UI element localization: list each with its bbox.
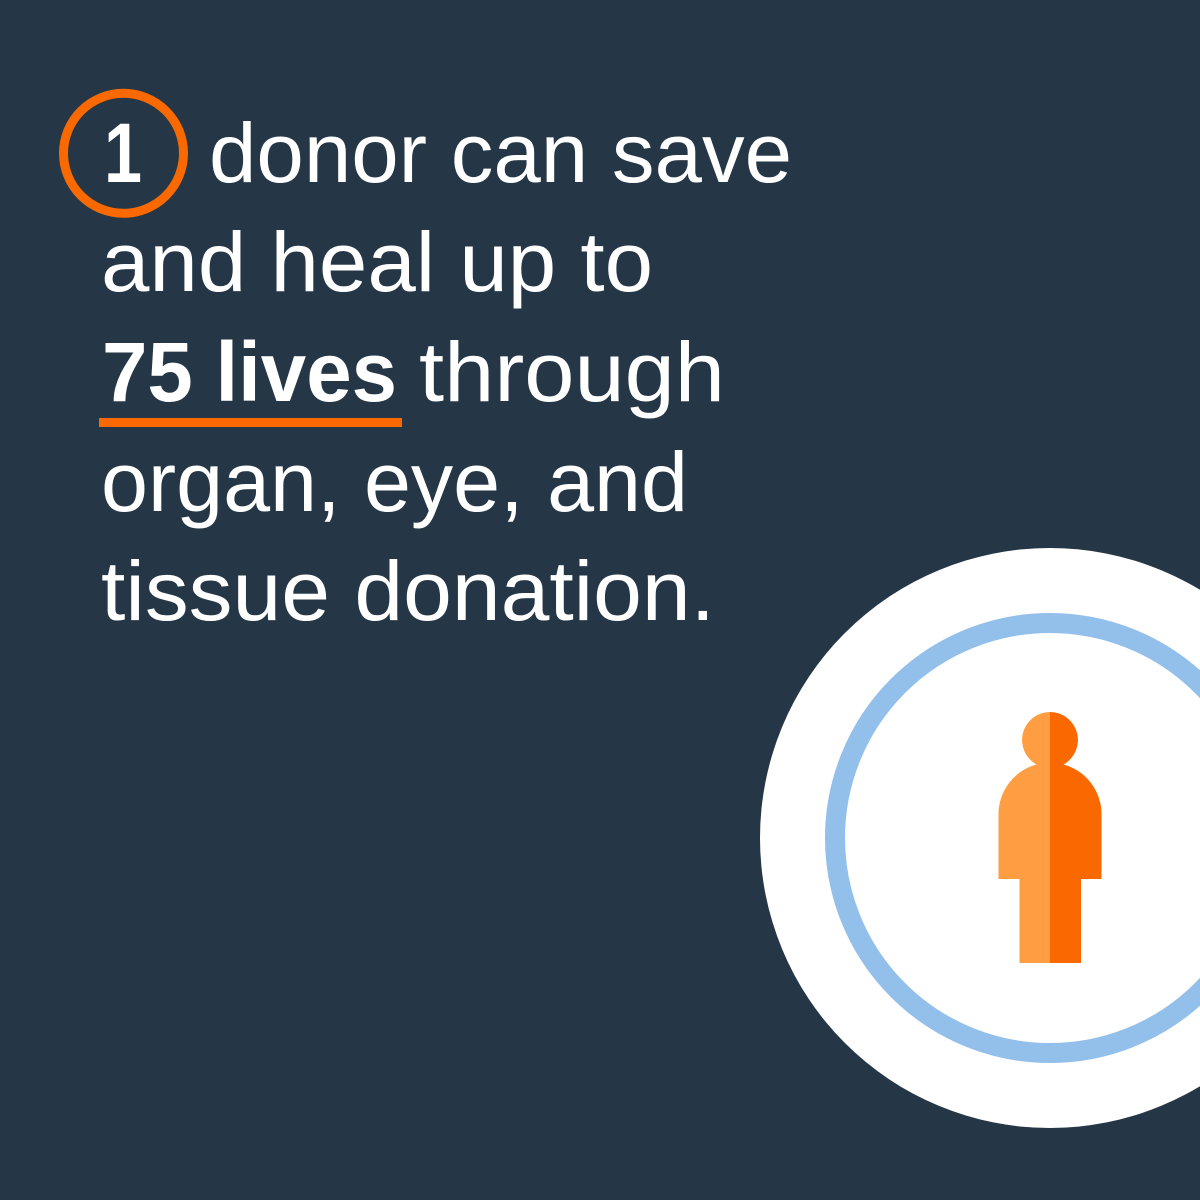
line 3 text: through [419, 325, 725, 419]
white outer circle [760, 548, 1200, 1128]
underlined highlight: 75 lives: 75 lives [102, 325, 397, 419]
headline text [64, 93, 792, 638]
person icon in concentric circles [760, 548, 1200, 1128]
line 5 text: tissue donation. [101, 544, 715, 638]
light blue ring [835, 623, 1200, 1053]
line 2 text: and heal up to [101, 215, 653, 309]
number 1 in orange circle [64, 93, 184, 213]
icon: half-toned person [998, 712, 1102, 963]
line 1 text: donor can save [209, 106, 792, 200]
number 1 in orange circle: 1 [104, 106, 142, 200]
line 4 text: organ, eye, and [101, 435, 688, 529]
